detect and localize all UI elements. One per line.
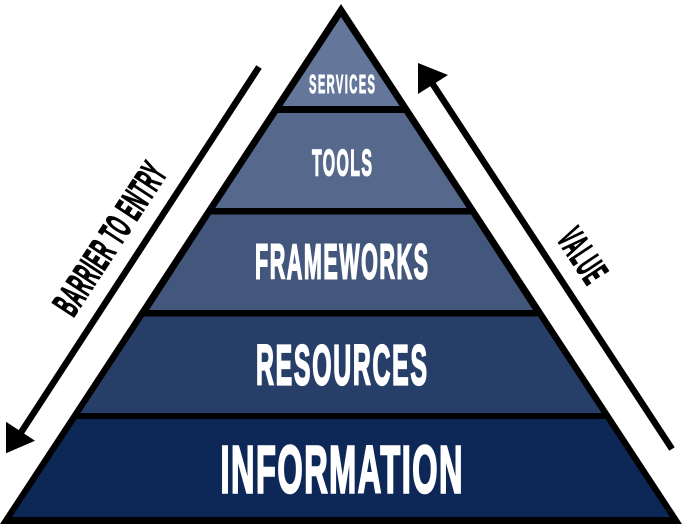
tier: frameworks xyxy=(149,214,533,310)
tier: services xyxy=(282,17,400,106)
tier: information: INFORMATION xyxy=(220,433,463,508)
label: value: VALUE xyxy=(548,221,615,292)
label: barrier to entry: BARRIER TO ENTRY xyxy=(46,156,176,323)
tier: resources xyxy=(80,316,602,413)
tier: tools: TOOLS xyxy=(312,143,372,185)
tier: frameworks: FRAMEWORKS xyxy=(255,236,428,290)
tier: information xyxy=(12,419,670,517)
tier: tools xyxy=(215,113,467,208)
arrow: barrier to entry (down-left) xyxy=(6,67,259,453)
tier: services: SERVICES xyxy=(309,71,375,99)
arrow: value (up-left) xyxy=(418,63,672,449)
tier: resources: RESOURCES xyxy=(256,334,427,397)
